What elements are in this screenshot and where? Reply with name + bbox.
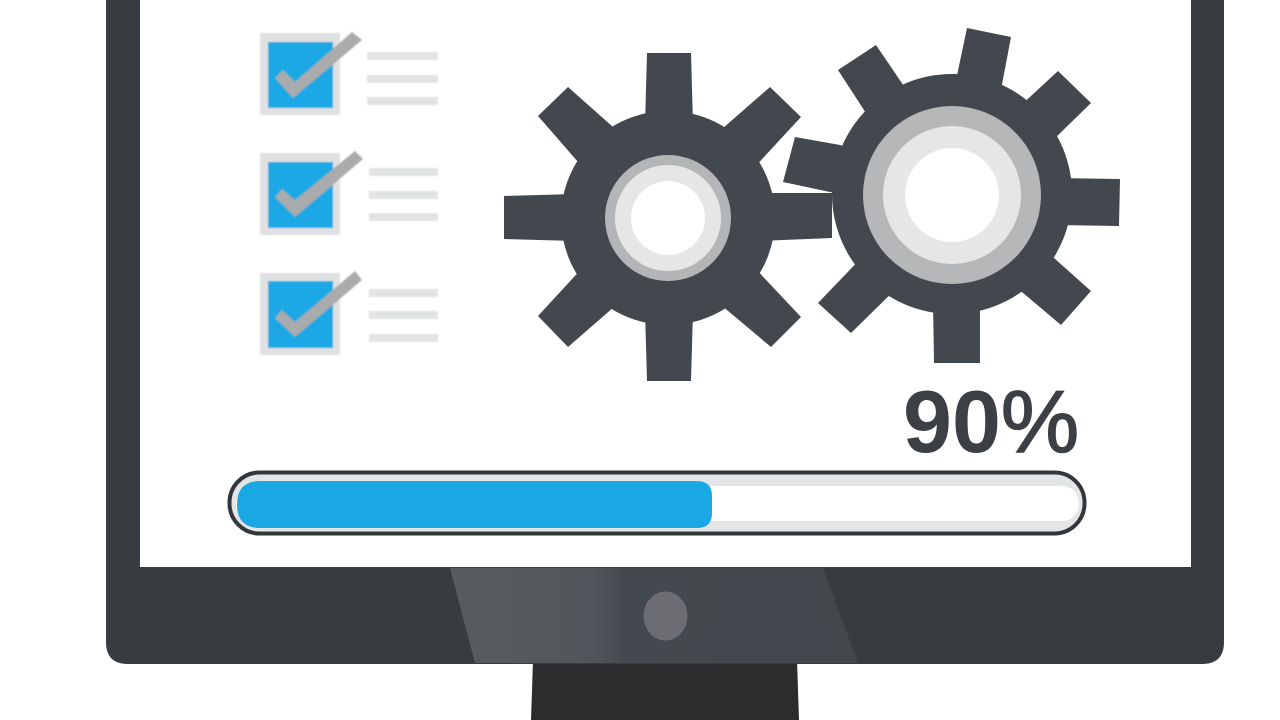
monitor stand bbox=[531, 660, 799, 720]
progress track bbox=[230, 472, 1084, 534]
icon: left gear bbox=[504, 53, 832, 381]
checklist item 2 bbox=[260, 151, 438, 235]
progress fill bbox=[237, 481, 712, 528]
progress bar bbox=[230, 472, 1084, 534]
monitor screen bbox=[140, 0, 1191, 567]
checklist bbox=[260, 32, 438, 355]
percentage label: 90% bbox=[903, 372, 1079, 471]
power button bbox=[644, 592, 688, 640]
bezel highlight bbox=[450, 568, 858, 663]
checklist item 1 bbox=[260, 32, 438, 115]
checklist item 3 bbox=[260, 271, 438, 355]
icon: right gear bbox=[783, 28, 1120, 363]
